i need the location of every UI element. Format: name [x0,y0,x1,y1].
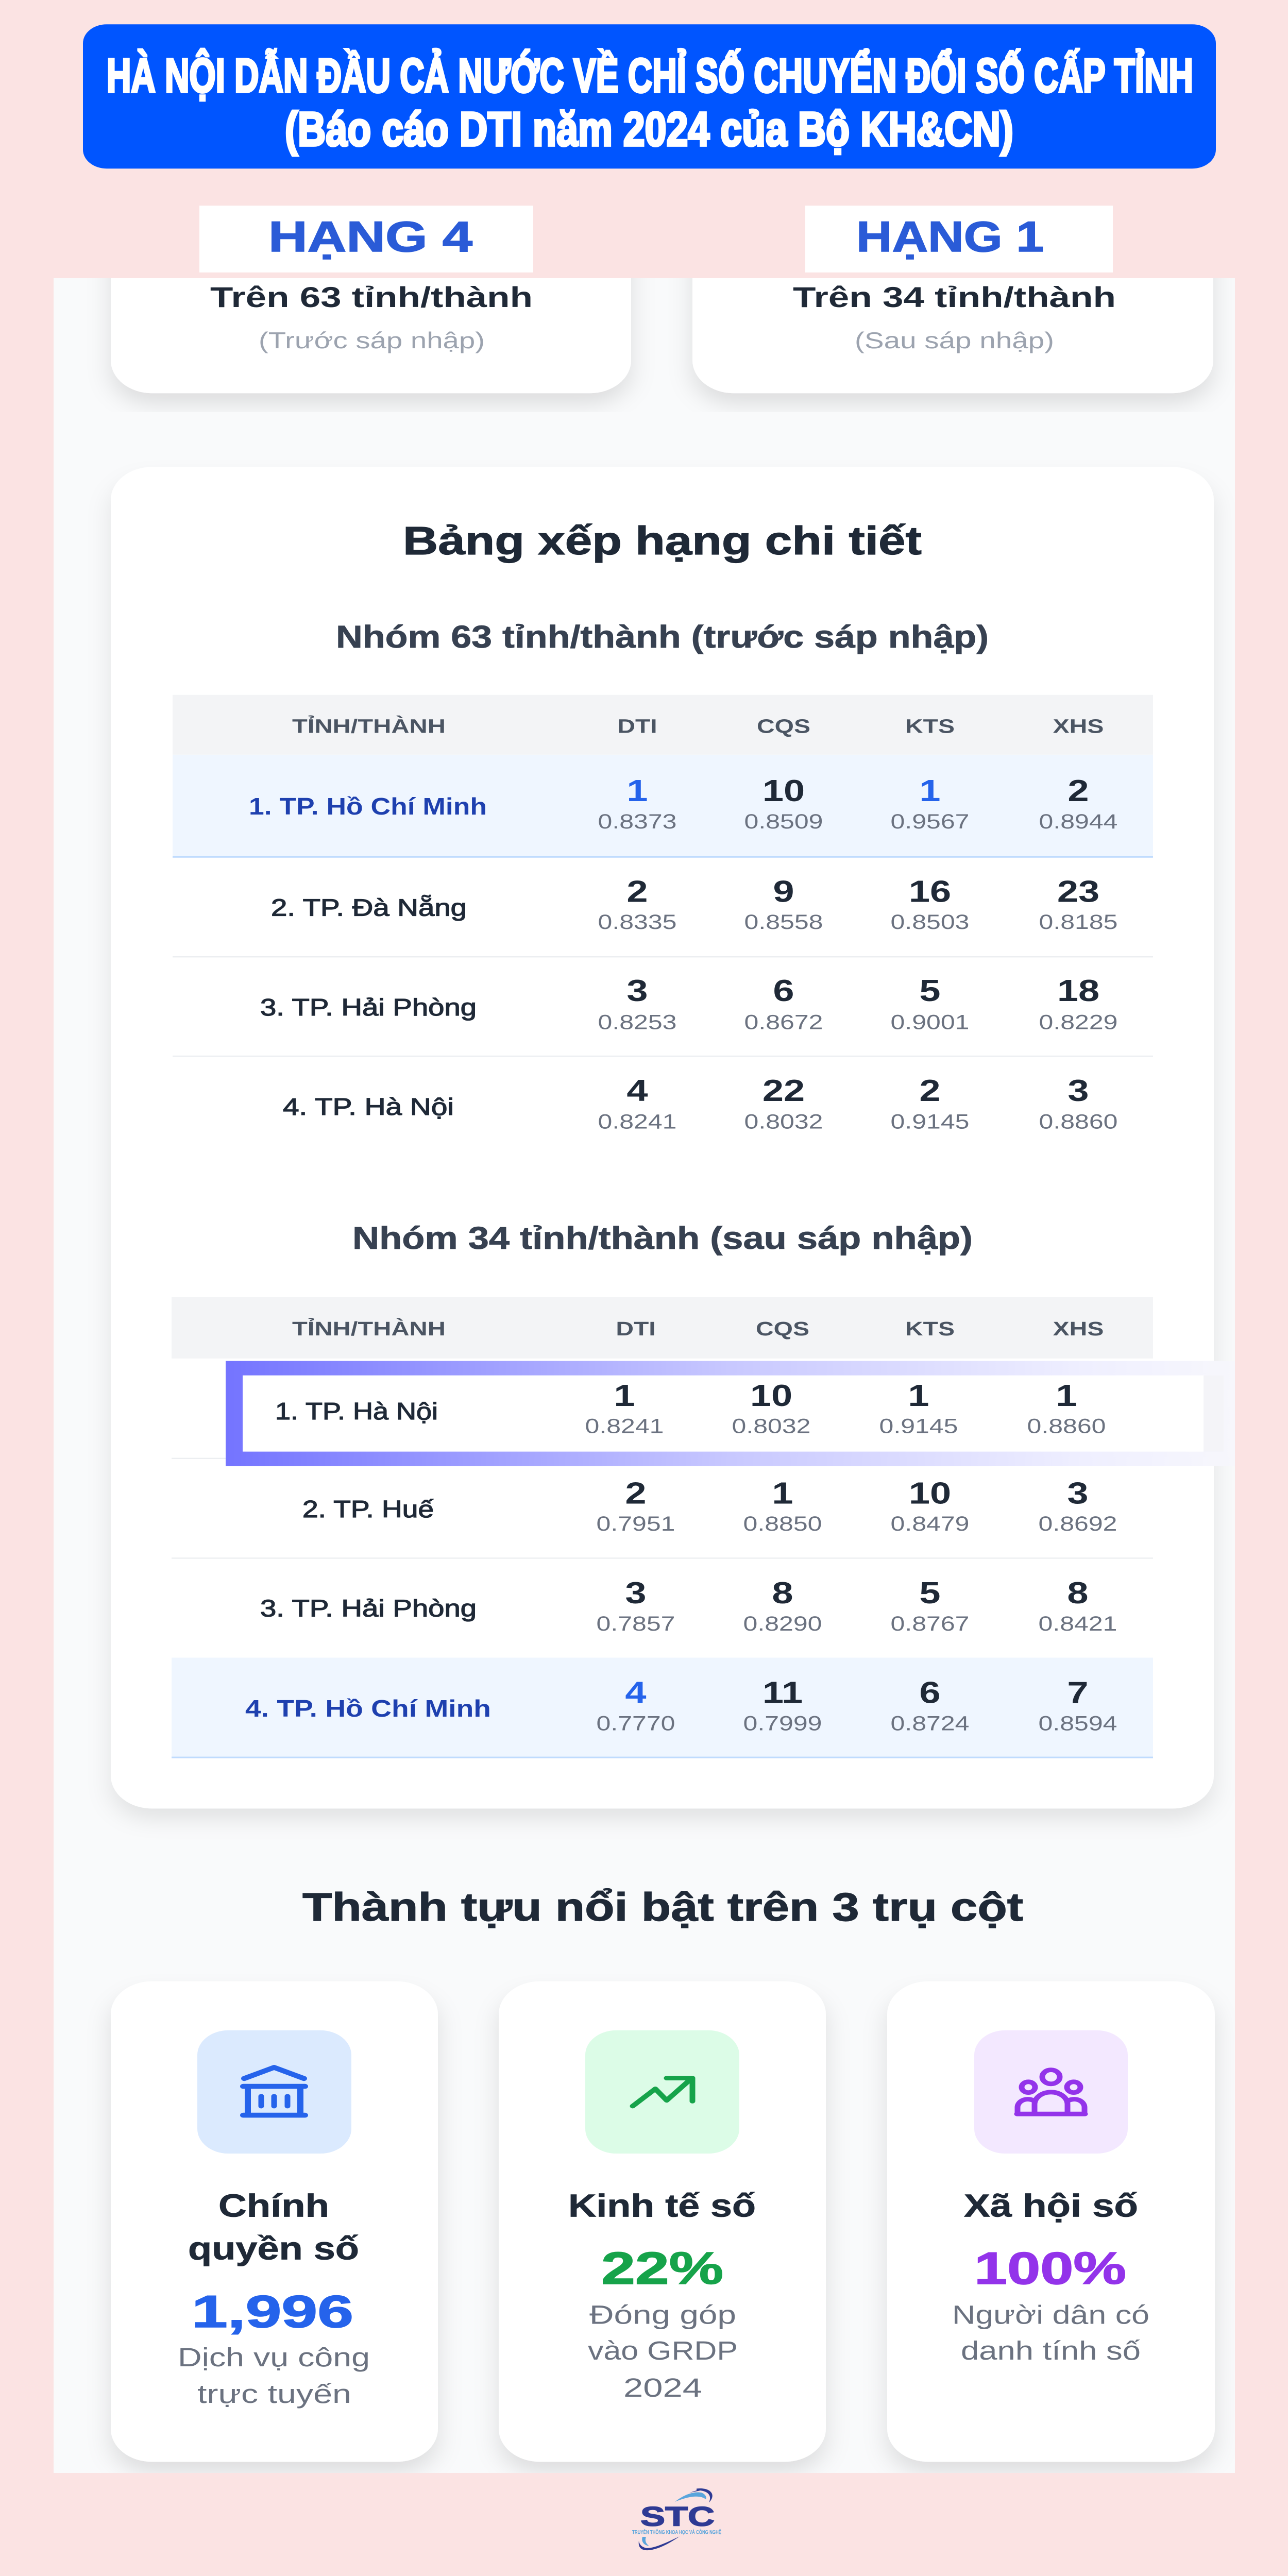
stat: 100%: 100% [974,2243,1126,2294]
row: TP. Hồ Chí Minh: 0.8724 [891,1711,969,1735]
rank label: Hạng 4: HẠNG 4 [268,213,472,261]
row: TP. Hải Phòng: 5 [919,1576,941,1610]
row: TP. Hồ Chí Minh: 0.8944 [1039,810,1117,833]
row: TP. Huế: 0.8479 [891,1512,969,1535]
highlighted row: TP. Hà Nội: 1 [614,1379,635,1413]
highlighted row: TP. Hà Nội: 0.8032 [732,1414,810,1437]
row: TP. Hồ Chí Minh: 0.8373 [598,810,676,833]
row: TP. Hà Nội: 4 [626,1074,648,1108]
row: TP. Hải Phòng: 0.8229 [1039,1010,1117,1033]
card: digital society [887,1981,1215,2462]
row: TP. Huế [172,1476,1153,1559]
row: TP. Hải Phòng: 5 [919,974,941,1008]
rank card: after merger: (Sau sáp nhập) [855,327,1054,353]
card: digital government: quyền số [188,2230,359,2266]
card: digital government [111,1981,438,2462]
icon: trending up [585,2030,739,2154]
description: Dịch vụ công [178,2343,370,2372]
row: TP. Đà Nẵng: 0.8558 [744,910,823,934]
row: TP. Hồ Chí Minh: 4. TP. Hồ Chí Minh [245,1695,491,1722]
row: TP. Hà Nội: 22 [762,1074,805,1108]
row divider under highlighted row [172,1458,1153,1459]
row: TP. Huế: 1 [772,1476,793,1511]
rank card: before merger [105,278,637,410]
row: TP. Hồ Chí Minh: 0.7999 [743,1711,822,1735]
panel: detailed rankings [111,467,1214,1808]
row: TP. Đà Nẵng: 0.8503 [891,910,969,934]
row: TP. Hải Phòng: 0.8421 [1039,1612,1117,1635]
highlighted row: TP. Hà Nội: 0.8241 [585,1414,664,1437]
rank label: Hạng 1: HẠNG 1 [856,213,1044,261]
row: TP. Hồ Chí Minh [172,1658,1153,1758]
row: TP. Hồ Chí Minh: 7 [1067,1676,1089,1710]
highlighted row: TP. Hà Nội: 1. TP. Hà Nội [275,1398,438,1425]
row: TP. Hải Phòng: 3 [626,974,648,1008]
row: TP. Hồ Chí Minh: 0.9567 [891,810,969,833]
row: TP. Hà Nội: 2 [919,1074,941,1108]
row: TP. Hải Phòng: 3. TP. Hải Phòng [260,1595,477,1622]
row: TP. Đà Nẵng: 2 [626,874,648,909]
row: TP. Hải Phòng: 0.7857 [597,1612,675,1635]
card: digital economy: 2024 [623,2374,702,2402]
row: TP. Hải Phòng: 0.8253 [598,1010,676,1033]
highlighted row: TP. Hà Nội: 10 [750,1379,792,1413]
row: TP. Đà Nẵng: 0.8185 [1039,910,1117,934]
row: TP. Hà Nội: 3 [1067,1074,1089,1108]
rank label: Hạng 1 [805,206,1113,273]
row: TP. Hải Phòng: 0.8290 [743,1612,822,1635]
logo: STC: TRUYỀN THÔNG KHOA HỌC VÀ CÔNG NGHỆ [632,2529,721,2535]
table header: DTI [616,1318,656,1340]
row: TP. Hà Nội: 0.9145 [891,1110,969,1133]
row: TP. Hồ Chí Minh: 1. TP. Hồ Chí Minh [249,793,487,820]
row: TP. Hà Nội: 0.8241 [598,1110,676,1133]
table header: XHS [1053,1318,1104,1340]
stat: 1,996: 1,996 [192,2286,353,2337]
card heading: Kinh tế số [568,2188,756,2224]
row: TP. Hồ Chí Minh: 11 [762,1676,803,1710]
row: TP. Hà Nội: 0.8860 [1039,1110,1117,1133]
row: TP. Hồ Chí Minh [173,755,1153,858]
table header: TỈNH/THÀNH [292,1317,446,1340]
row: TP. Đà Nẵng: 23 [1057,874,1099,909]
row: TP. Hải Phòng: 6 [773,974,794,1008]
heading: detailed rankings: Bảng xếp hạng chi tiết [403,519,922,563]
row: TP. Hải Phòng: 3. TP. Hải Phòng [260,994,477,1021]
row: TP. Hà Nội: 0.8032 [744,1110,823,1133]
row: TP. Hồ Chí Minh: 1 [626,774,648,808]
highlighted row: TP. Hà Nội: 1 [908,1379,929,1413]
row: TP. Hà Nội: 4. TP. Hà Nội [283,1093,454,1121]
row: TP. Hồ Chí Minh: 6 [919,1676,941,1710]
description: Đóng góp [589,2300,736,2330]
row: TP. Hồ Chí Minh: 0.8509 [744,810,823,833]
table: 63 provinces [173,695,1153,1133]
table: 34 provinces [172,1297,1153,1758]
row: TP. Hồ Chí Minh: 1 [919,774,941,808]
table header: CQS [757,716,810,737]
row: TP. Đà Nẵng: 9 [773,874,794,909]
icon: people group [974,2030,1128,2154]
content panel [54,278,1235,2473]
row: TP. Hà Nội [283,1074,1117,1133]
card: digital society: danh tính số [961,2336,1141,2365]
row: TP. Hải Phòng: 0.9001 [891,1010,969,1033]
card heading: Xã hội số [964,2188,1138,2224]
row: TP. Hải Phòng [173,974,1153,1057]
row: TP. Hải Phòng: 0.8672 [744,1010,823,1033]
highlighted row: TP. Hà Nội: 0.9145 [879,1414,958,1437]
row: TP. Hồ Chí Minh: 10 [762,774,805,808]
subheading: group of 34: Nhóm 34 tỉnh/thành (sau sáp nhập) [352,1221,973,1256]
table header [173,695,1153,755]
row: TP. Hồ Chí Minh: 4 [625,1676,647,1710]
rank card: after merger: Trên 34 tỉnh/thành [793,282,1116,313]
description: Người dân có [952,2300,1149,2330]
table header: CQS [756,1318,809,1340]
table header: DTI [617,716,657,737]
card: digital economy: vào GRDP [588,2336,738,2365]
row: TP. Huế: 3 [1067,1476,1089,1511]
rank card: before merger: (Trước sáp nhập) [259,327,485,353]
row: TP. Huế: 2. TP. Huế [302,1496,434,1522]
highlighted row: TP. Hà Nội: 1 [1056,1379,1077,1413]
highlighted row: TP. Hà Nội: 0.8860 [1027,1414,1106,1437]
rank label: Hạng 4 [199,206,533,273]
row: TP. Huế: 0.8692 [1039,1512,1117,1535]
card: digital economy [499,1981,826,2462]
logo: STC: STC [640,2501,715,2532]
highlighted row: TP. Hà Nội [226,1361,1235,1466]
table header: TỈNH/THÀNH [292,715,446,737]
row: TP. Đà Nẵng: 16 [909,874,951,909]
row: TP. Hải Phòng [260,1576,1117,1635]
card: digital government: trực tuyến [197,2380,351,2409]
row: TP. Hải Phòng: 8 [1067,1576,1089,1610]
row: TP. Hồ Chí Minh: 2 [1067,774,1089,808]
row: TP. Huế: 10 [909,1476,951,1511]
row: TP. Hồ Chí Minh: 0.8594 [1039,1711,1117,1735]
row: TP. Huế: 0.8850 [743,1512,822,1535]
row: TP. Hải Phòng: 8 [772,1576,793,1610]
title banner [83,24,1216,168]
subheading: group of 63: Nhóm 63 tỉnh/thành (trước sáp nhập) [336,619,989,654]
row: TP. Đà Nẵng: 2. TP. Đà Nẵng [271,894,467,921]
logo: STC [632,2488,721,2550]
row: TP. Huế: 0.7951 [597,1512,675,1535]
row: TP. Huế: 2 [625,1476,647,1511]
row: TP. Hải Phòng: 0.8767 [891,1612,969,1635]
table header [172,1297,1153,1359]
icon: government building [197,2030,351,2154]
row: TP. Hồ Chí Minh: 0.7770 [597,1711,675,1735]
heading: achievements: Thành tựu nổi bật trên 3 trụ cột [302,1885,1023,1929]
rank card: before merger: Trên 63 tỉnh/thành [210,282,533,313]
row: TP. Đà Nẵng [173,874,1153,957]
table header: KTS [905,716,955,737]
stat: 22%: 22% [601,2243,723,2294]
row: TP. Hải Phòng: 18 [1057,974,1099,1008]
row: TP. Hải Phòng: 3 [625,1576,647,1610]
rank card: after merger [686,278,1219,410]
table header: KTS [905,1318,955,1340]
table header: XHS [1053,716,1104,737]
card heading: Chính [218,2188,329,2224]
row: TP. Đà Nẵng: 0.8335 [598,910,676,934]
